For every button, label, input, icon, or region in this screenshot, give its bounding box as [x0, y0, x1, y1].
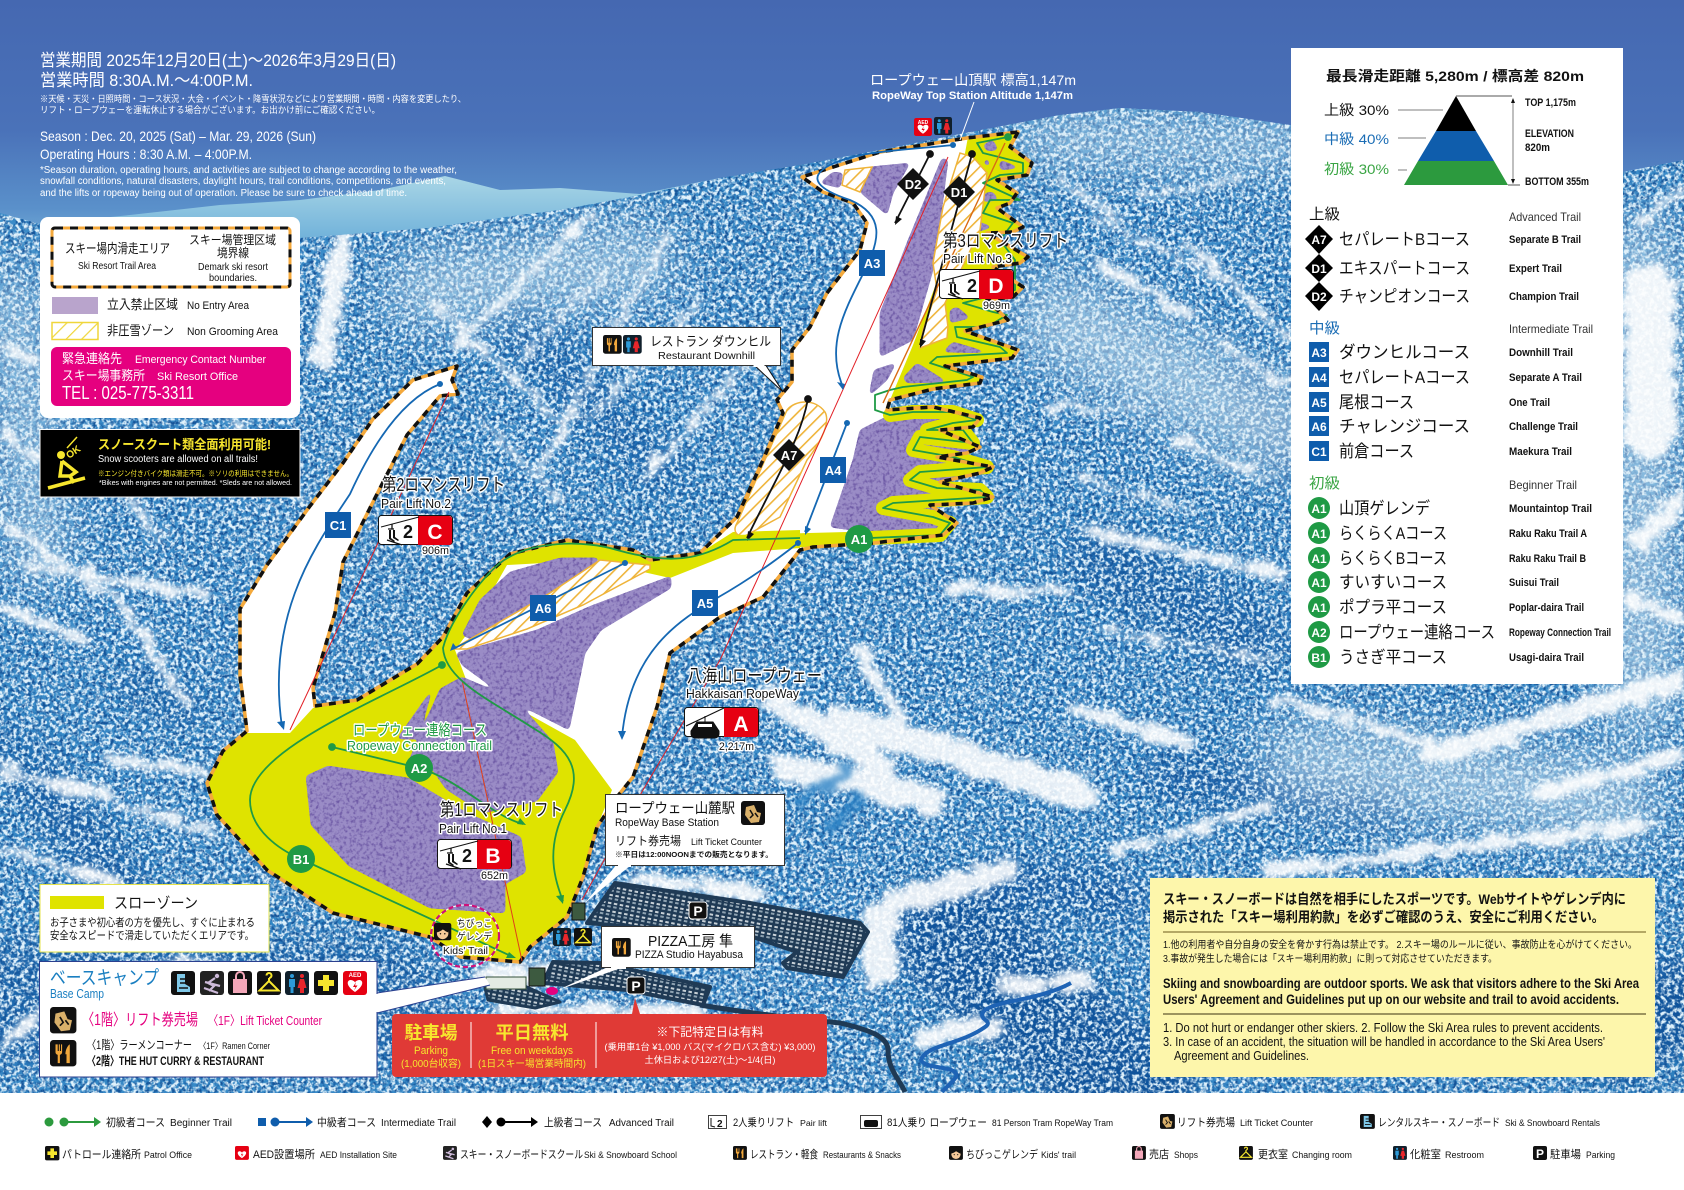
- legend: intermediate trail: Intermediate Trail: [381, 1118, 456, 1129]
- beginner trails list: Usagi-daira Trail: [1509, 652, 1584, 664]
- label: ropeway top station: ロープウェー山頂駅 標高1,147m: [870, 72, 1076, 88]
- beginner trail lines: [250, 134, 1011, 958]
- trail badge: A6: [530, 595, 556, 621]
- lift sign: pair lift no.3: [940, 231, 1068, 312]
- legend: no entry area: No Entry Area: [187, 300, 250, 312]
- callout: pizza studio hayabusa: [558, 926, 754, 990]
- callout: ropeway base station: ※平日は12:00NOONまでの販売となります。: [615, 849, 773, 859]
- legend: boundary: [52, 228, 290, 287]
- parking icon: P: [631, 978, 641, 994]
- beginner trails list: Raku Raku Trail B: [1509, 553, 1586, 565]
- panel: snow scooter notice: Snow scooters are allowed on all trails!: [98, 454, 258, 465]
- non grooming areas: [453, 153, 987, 649]
- emergency contact: スキー場事務所: [62, 368, 145, 383]
- serpentine beginner trail, lower: [733, 412, 987, 542]
- panel: terms of use notice: 1. Do not hurt or endanger other skiers. 2. Follow the Ski Area rules to prevent accidents.: [1163, 1021, 1603, 1035]
- lift sign: pair lift no.1: 652m: [481, 870, 508, 882]
- panel: base camp: 〈1階〉ラーメンコーナー: [87, 1038, 192, 1052]
- trail badge: D2: [897, 168, 929, 200]
- legend: AED: AED設置場所: [253, 1147, 315, 1161]
- intermediate trails list: Intermediate Trail: [1509, 322, 1593, 336]
- intermediate trails list: Separate A Trail: [1509, 372, 1582, 384]
- difficulty pyramid chart: 中級 40%: [1324, 131, 1389, 147]
- beginner trails list: Raku Raku Trail A: [1509, 528, 1587, 540]
- panel: parking information: [392, 998, 827, 1077]
- difficulty pyramid chart: 820m: [1525, 142, 1550, 154]
- facility icons: [171, 971, 367, 995]
- legend: advanced trail: Advanced Trail: [609, 1118, 674, 1129]
- kids trail circle: ちびっこ: [457, 918, 492, 930]
- opening information text: Season : Dec. 20, 2025 (Sat) – Mar. 29, 2026 (Sun): [40, 128, 316, 144]
- trail badge: A7: [773, 439, 805, 471]
- trail badge: A1: A1: [851, 532, 867, 547]
- panel: bottom symbol legend: [0, 1093, 1684, 1190]
- legend: ski school: [443, 1146, 677, 1161]
- icons: restroom and changing room at base: [553, 928, 592, 946]
- panel: terms of use notice: 3. In case of an accident, the situation will be handled in accordance to the Ski Area Users': [1163, 1035, 1605, 1049]
- panel: snow scooter notice: [40, 430, 300, 497]
- legend: tram: 81人乗り ロープウェー: [887, 1116, 987, 1129]
- legend: boundary: Demark ski resort: [198, 262, 268, 273]
- panel: slow zone: スローゾーン: [114, 895, 198, 912]
- beginner trails list: Mountaintop Trail: [1509, 503, 1592, 515]
- beginner trails list: A1: [1311, 527, 1327, 541]
- label: ropeway top station: RopeWay Top Station Altitude 1,147m: [872, 90, 1073, 102]
- legend: changing room: 更衣室: [1258, 1148, 1288, 1161]
- opening information text: Operating Hours : 8:30 A.M. – 4:00P.M.: [40, 146, 252, 162]
- legend: tram: 81 Person Tram RopeWay Tram: [992, 1118, 1113, 1128]
- opening information text: 営業期間 2025年12月20日(土)〜2026年3月29日(日): [40, 51, 396, 70]
- lift sign: pair lift no.2: 906m: [422, 545, 449, 557]
- beginner trails list: Suisui Trail: [1509, 577, 1559, 589]
- panel: base camp: ベースキャンプ: [50, 967, 159, 989]
- legend: non grooming area: Non Grooming Area: [187, 326, 279, 338]
- beginner trails list: Beginner Trail: [1509, 478, 1577, 492]
- ski resort map: [207, 132, 1068, 967]
- advanced trails list: 上級: [1309, 206, 1340, 223]
- intermediate trails list: C1: [1311, 445, 1327, 459]
- lift sign: pair lift no.3: 969m: [983, 300, 1010, 312]
- lift sign: hakkaisan ropeway: 2,217m: [719, 741, 754, 753]
- emergency contact: Ski Resort Office: [157, 371, 238, 383]
- legend: pair lift: Pair lift: [800, 1119, 828, 1128]
- lift sign: pair lift no.1: 第1ロマンスリフト: [440, 800, 563, 820]
- panel: parking information: Parking: [414, 1045, 448, 1057]
- panel: base camp: 〈2階〉THE HUT CURRY & RESTAURANT: [87, 1054, 264, 1068]
- advanced trails list: Separate B Trail: [1509, 234, 1581, 246]
- legend: patrol office: Patrol Office: [144, 1150, 192, 1160]
- opening information text: リフト・ロープウェーを運転休止する場合がございます。お出かけ前にご確認ください。: [40, 104, 380, 115]
- intermediate trails list: チャレンジコース: [1339, 417, 1470, 436]
- trail badge: C1: C1: [330, 518, 346, 533]
- lift sign: pair lift no.2: [378, 475, 505, 557]
- legend: intermediate trail: [258, 1116, 456, 1129]
- beginner trails list: らくらくAコース: [1339, 524, 1447, 543]
- facility icons: AED: [349, 973, 362, 979]
- trail badge: A4: [820, 457, 846, 483]
- ski area snow surface: [207, 132, 1032, 962]
- trail badge: A2: A2: [411, 761, 427, 776]
- intermediate trails list: A6: [1311, 420, 1327, 434]
- ropeway base building: [572, 903, 585, 920]
- advanced trails list: エキスパートコース: [1339, 259, 1470, 278]
- panel: base camp: [40, 962, 490, 1077]
- panel: snow scooter notice: ※エンジン付きバイク類は滑走不可。※ソリの利用はできません。: [98, 468, 293, 478]
- beginner trails list: Poplar-daira Trail: [1509, 602, 1584, 614]
- slow zone, upper steep section: [890, 132, 1032, 400]
- legend: lift ticket counter: [1160, 1114, 1313, 1129]
- panel: slow zone: 安全なスピードで滑走していただくエリアです。: [50, 928, 254, 942]
- legend: patrol office: パトロール連絡所: [62, 1147, 141, 1161]
- trail badge: D1: D1: [951, 185, 967, 200]
- beginner trails list: らくらくBコース: [1339, 549, 1447, 568]
- panel: slow zone: [40, 884, 269, 952]
- lift sign: pair lift no.3: D: [988, 275, 1004, 298]
- panel: terms of use notice: 掲示された「スキー場利用約款」を必ずご確認のうえ、安全にご利用ください。: [1163, 909, 1604, 925]
- legend: beginner trail: 初級者コース: [106, 1116, 165, 1129]
- intermediate trails list: [1309, 320, 1593, 461]
- legend: non grooming area: 非圧雪ゾーン: [107, 323, 174, 338]
- beginner trails list: うさぎ平コース: [1339, 648, 1447, 667]
- panel: parking information: (1日スキー場営業時間内): [478, 1057, 586, 1070]
- callout: pizza studio hayabusa: PIZZA工房 隼: [648, 933, 733, 950]
- panel: parking information: 土休日および12/27(土)〜1/4(日): [644, 1054, 776, 1065]
- lift sign: hakkaisan ropeway: [684, 666, 822, 753]
- legend: rentals: レンタルスキー・スノーボード: [1378, 1116, 1500, 1129]
- access road: [700, 1005, 905, 1092]
- intermediate trails list: A3: [1311, 346, 1327, 360]
- panel: base camp: Base Camp: [50, 986, 104, 1001]
- callout: ropeway base station: リフト券売場: [615, 833, 681, 848]
- legend: rentals: Ski & Snowboard Rentals: [1505, 1118, 1600, 1128]
- legend: boundary: スキー場管理区域: [189, 232, 276, 247]
- panel: parking information: (乗用車1台 ¥1,000 バス(マイクロバス含む) ¥3,000): [604, 1041, 816, 1052]
- legend: no entry area: [52, 297, 250, 314]
- parking icon: [627, 977, 645, 994]
- advanced trail lines: [747, 151, 975, 541]
- difficulty pyramid chart: [1324, 96, 1589, 188]
- panel: map legend: [40, 217, 300, 418]
- legend: boundary: boundaries.: [209, 273, 257, 284]
- callout: restaurant downhill: [592, 328, 783, 392]
- beginner trails list: ロープウェー連絡コース: [1339, 623, 1495, 642]
- trail badge: A4: A4: [825, 463, 842, 478]
- intermediate trails list: ダウンヒルコース: [1339, 343, 1470, 362]
- river: [921, 983, 1071, 1092]
- advanced trails list: A7: [1311, 233, 1327, 247]
- parking icon: P: [693, 903, 703, 919]
- legend: changing room: [1239, 1146, 1352, 1161]
- legend: restaurants: Restaurants & Snacks: [823, 1150, 901, 1160]
- legend: boundary: Ski Resort Trail Area: [78, 261, 156, 272]
- difficulty pyramid chart: TOP 1,175m: [1525, 97, 1576, 109]
- trail badge: C1: [325, 512, 351, 538]
- advanced trails list: Advanced Trail: [1509, 210, 1581, 224]
- base camp building: [486, 977, 526, 989]
- trail badge: A3: A3: [864, 256, 880, 271]
- intermediate trails list: A5: [1311, 396, 1327, 410]
- advanced trails list: D1: [1311, 262, 1327, 276]
- callout: ropeway base station: [585, 794, 784, 903]
- panel: base camp: 〈1F〉Lift Ticket Counter: [208, 1013, 323, 1028]
- base camp annex: [529, 968, 545, 986]
- legend: beginner trail: [44, 1116, 232, 1129]
- beginner trails list: ポプラ平コース: [1339, 598, 1447, 617]
- icon: snow scooter rider: [48, 437, 85, 488]
- legend: parking: Parking: [1586, 1150, 1615, 1160]
- legend: restaurants: [733, 1146, 901, 1161]
- callout: ropeway base station: Lift Ticket Counter: [691, 837, 762, 847]
- advanced trails list: セパレートBコース: [1339, 230, 1470, 249]
- trail badge: A7: A7: [781, 448, 797, 463]
- heading: longest run and vertical drop: 最長滑走距離 5,280m / 標高差 820m: [1326, 68, 1584, 84]
- background: distant hazy mountain range: [0, 176, 720, 260]
- beginner trails list: A1: [1311, 576, 1327, 590]
- trail badge: A5: [692, 590, 718, 616]
- kids trail circle: [431, 905, 499, 967]
- intermediate trails list: Maekura Trail: [1509, 446, 1572, 458]
- no entry areas: [306, 140, 1020, 913]
- legend: ski school: Ski & Snowboard School: [584, 1150, 677, 1160]
- emergency contact: [51, 347, 291, 406]
- legend: non grooming area: [52, 322, 279, 340]
- legend: advanced trail: 上級者コース: [544, 1116, 602, 1129]
- legend: parking: [1533, 1146, 1615, 1161]
- difficulty pyramid chart: 初級 30%: [1324, 161, 1389, 177]
- background: winter sky: [0, 0, 1684, 260]
- beginner trails list: [1308, 475, 1611, 668]
- parking icon: [689, 902, 707, 919]
- legend: advanced trail: [482, 1116, 674, 1129]
- panel: snow scooter notice: スノースクート類全面利用可能!: [98, 437, 271, 452]
- lift sign: pair lift no.1: [438, 800, 563, 882]
- intermediate trails list: 中級: [1309, 320, 1340, 337]
- trail badge: B1: [287, 845, 315, 873]
- trail badge: A3: [859, 250, 885, 276]
- callout: ropeway base station: ロープウェー山麓駅: [615, 800, 735, 816]
- difficulty pyramid chart: 上級 30%: [1324, 102, 1389, 118]
- lift sign: pair lift no.2: 2: [403, 522, 413, 542]
- legend: lift ticket counter: リフト券売場: [1177, 1115, 1235, 1129]
- legend: patrol office: [45, 1146, 192, 1161]
- trail badge: B1: B1: [293, 852, 309, 867]
- legend: no entry area: 立入禁止区域: [107, 297, 178, 312]
- lift sign: pair lift no.1: Pair Lift No.1: [439, 821, 507, 836]
- legend: tram: [860, 1116, 1113, 1129]
- legend: boundary: 境界線: [217, 245, 249, 260]
- panel: terms of use notice: 1.他の利用者や自分自身の安全を脅かす行為は禁止です。 2.スキー場のルールに従い、事故防止を心がけてください。: [1163, 938, 1637, 951]
- lower parking lot: [543, 962, 710, 1005]
- label: ropeway top station: AED: [918, 120, 929, 126]
- legend: restroom: Restroom: [1445, 1150, 1484, 1160]
- legend: shops: [1132, 1146, 1198, 1161]
- difficulty pyramid chart: BOTTOM 355m: [1525, 176, 1589, 188]
- beginner trails list: A1: [1311, 601, 1327, 615]
- trail badge: A5: A5: [697, 596, 713, 611]
- legend: kids trail: Kids' trail: [1041, 1150, 1076, 1160]
- trail badge: A6: A6: [535, 601, 551, 616]
- legend: kids trail: ちびっこゲレンデ: [966, 1147, 1038, 1161]
- beginner trails list: Ropeway Connection Trail: [1509, 627, 1611, 639]
- slow zone area: [207, 530, 800, 962]
- panel: terms of use notice: スキー・スノーボードは自然を相手にしたスポーツです。Webサイトやゲレンデ内に: [1163, 891, 1626, 907]
- lift sign: pair lift no.3: 2: [967, 276, 977, 296]
- label: ropeway connection trail: [347, 722, 492, 753]
- callout: restaurant downhill: レストラン ダウンヒル: [650, 334, 771, 349]
- intermediate trail arrowheads and dots: [277, 142, 956, 740]
- opening information text: snowfall conditions, natural disasters, daylight hours, trail conditions, competitions, and events,: [40, 176, 446, 187]
- lift sign: pair lift no.3: Pair Lift No.3: [943, 251, 1012, 266]
- lift sign: pair lift no.2: C: [427, 521, 443, 544]
- emergency contact: 緊急連絡先: [62, 351, 122, 366]
- legend: beginner trail: Beginner Trail: [170, 1118, 232, 1129]
- panel: terms of use notice: [1150, 878, 1655, 1077]
- legend: AED: [235, 1146, 397, 1161]
- upper parking lot: [587, 883, 868, 977]
- panel: base camp: 〈1F〉Ramen Corner: [199, 1041, 270, 1051]
- panel: parking information: 駐車場: [404, 1023, 458, 1043]
- legend: shops: Shops: [1174, 1150, 1198, 1160]
- emergency contact: Emergency Contact Number: [135, 354, 266, 366]
- lift sign: hakkaisan ropeway: Hakkaisan RopeWay: [686, 686, 799, 701]
- legend: changing room: Changing room: [1292, 1150, 1352, 1160]
- panel: parking information: (1,000台収容): [401, 1057, 461, 1070]
- lift and ropeway lines: [290, 143, 1005, 961]
- legend: intermediate trail: 中級者コース: [317, 1116, 376, 1129]
- beginner trails list: B1: [1311, 651, 1327, 665]
- legend: boundary: スキー場内滑走エリア: [65, 241, 170, 256]
- intermediate trails list: A4: [1311, 371, 1327, 385]
- panel: base camp: 〈1階〉リフト券売場: [82, 1011, 198, 1029]
- icon: snow scooter rider: OK: [64, 443, 84, 461]
- callout: restaurant downhill: Restaurant Downhill: [658, 351, 755, 362]
- panel: parking information: Free on weekdays: [491, 1045, 573, 1057]
- beginner trails list: A1: [1311, 502, 1327, 516]
- advanced trails list: チャンピオンコース: [1339, 287, 1470, 306]
- kids trail circle: ゲレンデ: [457, 930, 492, 943]
- legend: pair lift: 2人乗りリフト: [733, 1116, 794, 1129]
- legend: restroom: 化粧室: [1410, 1148, 1441, 1161]
- opening information text: and the lifts or ropeway being out of operation. Please be sure to check ahead of time.: [40, 188, 407, 199]
- legend: AED: AED Installation Site: [320, 1150, 397, 1160]
- beginner trails list: 山頂ゲレンデ: [1339, 498, 1430, 518]
- panel: parking information: ※下記特定日は有料: [656, 1024, 764, 1039]
- trail badge: D2: D2: [905, 177, 921, 192]
- lift sign: hakkaisan ropeway: 八海山ロープウェー: [687, 666, 822, 686]
- opening information text: 営業時間 8:30A.M.〜4:00P.M.: [40, 71, 253, 90]
- panel: snow scooter notice: *Bikes with engines are not permitted. *Sleds are not allowed.: [99, 478, 292, 487]
- callout: ropeway base station: RopeWay Base Station: [615, 817, 719, 829]
- legend: kids trail: [949, 1146, 1076, 1161]
- beginner trails list: すいすいコース: [1339, 573, 1447, 592]
- legend: ski school: スキー・スノーボードスクール: [460, 1148, 583, 1161]
- callout: pizza studio hayabusa: PIZZA Studio Hayabusa: [635, 949, 744, 961]
- small parking lot: [485, 984, 560, 1008]
- legend: pair lift: [708, 1116, 828, 1130]
- ski area boundary: [207, 132, 1032, 962]
- panel: slow zone: お子さまや初心者の方を優先し、すぐに止まれる: [50, 915, 255, 929]
- beginner trails list: 初級: [1309, 475, 1340, 492]
- beginner trails list: A2: [1311, 626, 1327, 640]
- lift sign: pair lift no.1: B: [485, 845, 501, 868]
- emergency contact: TEL : 025-775-3311: [62, 383, 194, 403]
- lift sign: pair lift no.3: 第3ロマンスリフト: [943, 231, 1068, 251]
- intermediate trails list: One Trail: [1509, 397, 1550, 409]
- legend: restaurants: レストラン・軽食: [750, 1148, 818, 1161]
- intermediate trails list: Downhill Trail: [1509, 347, 1573, 359]
- label: ropeway top station: [870, 72, 1076, 140]
- legend: parking: 駐車場: [1550, 1147, 1581, 1161]
- intermediate trails list: Challenge Trail: [1509, 421, 1578, 433]
- trail badge: A1: [845, 525, 873, 553]
- legend: rentals: [1360, 1114, 1600, 1129]
- difficulty pyramid chart: ELEVATION: [1525, 128, 1574, 140]
- green centre line A1: [847, 137, 1023, 539]
- lift sign: pair lift no.2: 第2ロマンスリフト: [382, 475, 505, 495]
- legend: restroom: [1393, 1146, 1484, 1161]
- panel: trail statistics and list: [1291, 48, 1623, 684]
- legend: lift ticket counter: Lift Ticket Counter: [1240, 1118, 1313, 1128]
- advanced trails list: Champion Trail: [1509, 291, 1579, 303]
- advanced trails list: D2: [1311, 290, 1327, 304]
- panel: parking information: 平日無料: [496, 1023, 568, 1043]
- trail badge: A2: [405, 754, 433, 782]
- intermediate trails list: 尾根コース: [1339, 393, 1414, 412]
- opening information text: [40, 51, 466, 199]
- intermediate trails list: セパレートAコース: [1339, 368, 1470, 387]
- panel: terms of use notice: Agreement and Guidelines.: [1174, 1049, 1309, 1063]
- panel: terms of use notice: 3.事故が発生した場合には「スキー場利用約款」に則って対応させていただきます。: [1163, 952, 1497, 965]
- label: ropeway connection trail: Ropeway Connection Trail: [347, 738, 492, 753]
- legend: parking: P: [1536, 1147, 1544, 1161]
- label: ropeway connection trail: ロープウェー連絡コース: [353, 722, 487, 739]
- opening information text: ※天候・天災・日照時間・コース状況・大会・イベント・降雪状況などにより営業期間・時間・内容を変更したり、: [40, 93, 466, 104]
- beginner trails list: A1: [1311, 552, 1327, 566]
- pink marker: [546, 987, 558, 995]
- advanced trails list: Expert Trail: [1509, 263, 1562, 275]
- parking lots and base buildings: [485, 883, 1071, 1092]
- kids trail circle: Kids' Trail: [443, 946, 488, 957]
- intermediate trails list: 前倉コース: [1339, 442, 1414, 461]
- trail badge: D1: [943, 176, 975, 208]
- intermediate trail lines: [279, 145, 953, 737]
- advanced trails list: [1305, 206, 1581, 311]
- lift sign: pair lift no.2: Pair Lift No.2: [381, 496, 451, 511]
- legend: shops: 売店: [1149, 1148, 1169, 1161]
- legend: pair lift: 2: [717, 1119, 723, 1130]
- lift sign: hakkaisan ropeway: A: [733, 713, 749, 736]
- opening information text: *Season duration, operating hours, and activities are subject to change according to the weather,: [40, 165, 457, 176]
- lift sign: pair lift no.1: 2: [462, 846, 472, 866]
